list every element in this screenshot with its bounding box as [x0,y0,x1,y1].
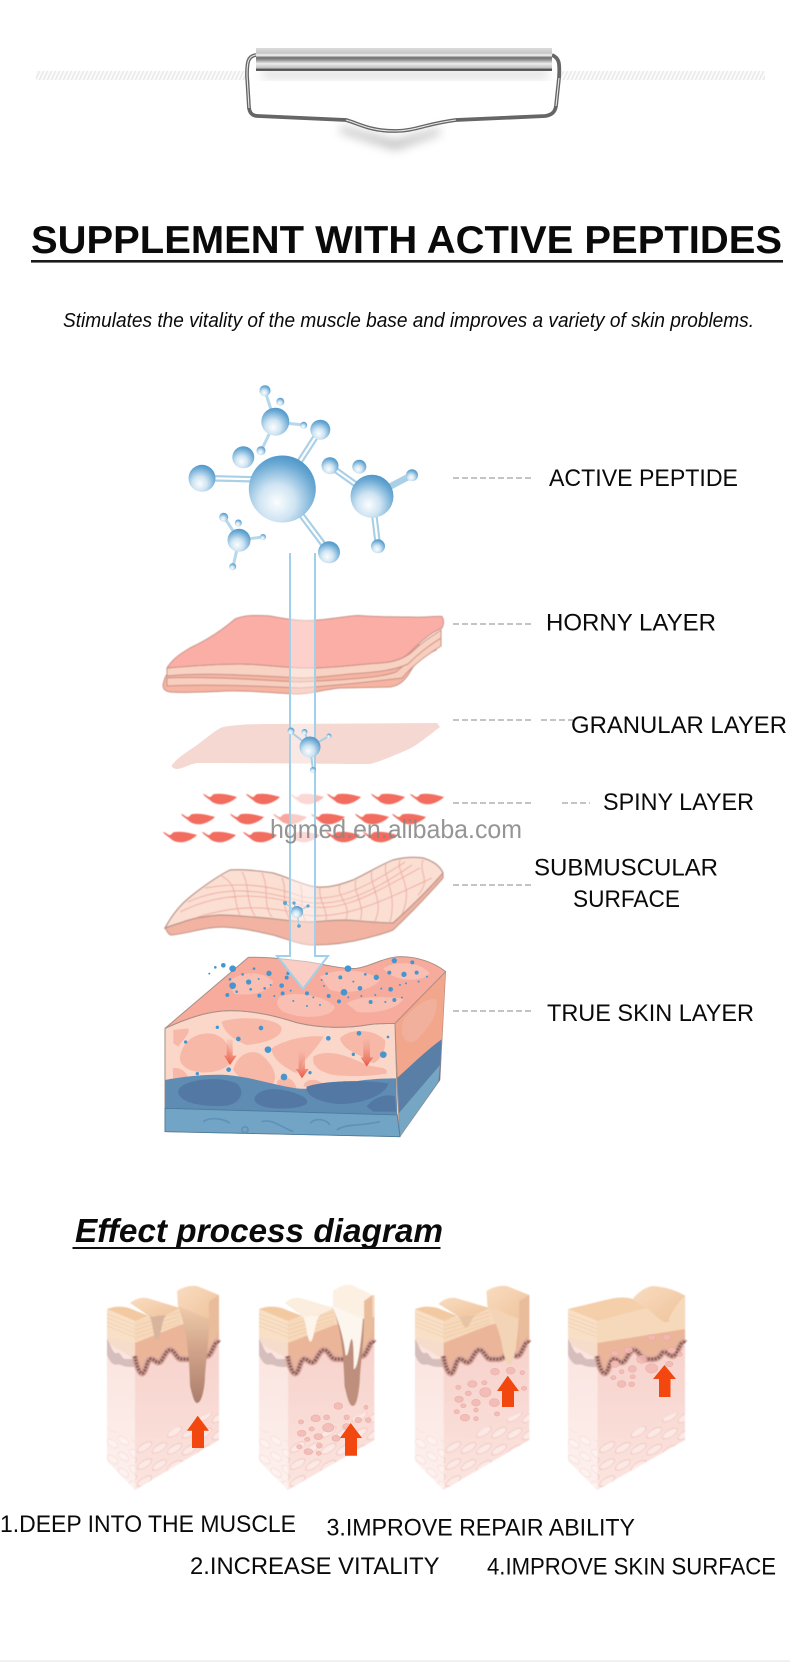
arrow: block 2 [340,1423,362,1456]
horny layer [163,615,444,694]
molecule bonds [202,430,412,552]
spheres [188,385,418,570]
bubbles: block 2 [297,1403,371,1455]
product: metal roller handle [36,48,765,150]
sheet grid lines [180,860,432,922]
label: horny layer: HORNY LAYER [546,610,716,636]
skin block 4: smooth surface [568,1286,685,1490]
caption 1: 1.DEEP INTO THE MUSCLE [0,1511,296,1538]
right face lobes [402,999,437,1042]
arrow: block 3 [497,1376,519,1407]
front face fat layer [165,1075,397,1115]
small molecule in granular layer [288,728,332,773]
hatched band right [558,71,765,80]
skin block 3: repair [415,1286,529,1490]
block right face [395,972,446,1137]
arrow: block 4 [653,1365,676,1397]
block right face blue [397,1039,442,1137]
label: spiny layer: SPINY LAYER [603,789,754,816]
fat layer lobes [178,1079,396,1112]
spiny layer cells [163,794,444,842]
skin block 2: vitality increasing [259,1285,374,1490]
caption 3: 3.IMPROVE REPAIR ABILITY [326,1514,635,1542]
label: true skin layer: TRUE SKIN LAYER [547,1000,754,1027]
bubbles: block 3 [454,1367,527,1421]
sheet top [165,857,443,928]
label: active peptide: ACTIVE PEPTIDE [549,465,738,492]
heading: effect process diagram: Effect process diagram [75,1212,443,1249]
front face tissue lobes [173,1018,387,1088]
submuscular surface sheet [165,857,443,945]
sheet underside [165,873,443,945]
downward arrows [224,1039,373,1078]
arrow: block 1 [187,1416,209,1448]
granular layer [172,723,440,769]
block front face [165,1011,400,1137]
top surface lobes [230,963,430,1017]
label: submuscular surface [534,854,718,913]
deep teal layer [165,1108,400,1137]
arrow tube: peptide penetration [277,553,328,989]
hatched band left [36,71,247,80]
roller bar [256,48,552,71]
bubbles: block 4 [611,1334,682,1387]
watermark: hgmed.en.alibaba.com [270,814,522,844]
block right face teal [397,1065,440,1137]
label: granular layer: GRANULAR LAYER [571,712,787,739]
wire highlight [247,55,559,131]
skin block 1: deep wrinkle [107,1286,219,1490]
deep layer marks [203,1119,380,1133]
bond centres [202,430,378,552]
handle shadow [340,126,440,150]
roller shadow [262,72,548,77]
true skin layer block [165,957,446,1137]
thin bonds [224,391,304,567]
caption 2: 2.INCREASE VITALITY [190,1553,440,1580]
label: submuscular surface: SUBMUSCULAR [534,854,718,882]
wrinkle tops [107,1307,149,1321]
label: submuscular surface: SURFACE [573,886,680,913]
subtitle: Stimulates the vitality of the muscle base and improves a variety of skin problems. [63,310,754,332]
small molecule in submuscular surface [283,901,310,928]
bottom edge strip [0,1660,790,1662]
wire frame [247,55,559,131]
title: SUPPLEMENT WITH ACTIVE PEPTIDES [31,219,782,262]
leader dashes [453,478,590,1011]
block top surface [165,957,446,1028]
peptide dots [184,958,428,1080]
diagram: active peptide molecules [188,385,418,570]
